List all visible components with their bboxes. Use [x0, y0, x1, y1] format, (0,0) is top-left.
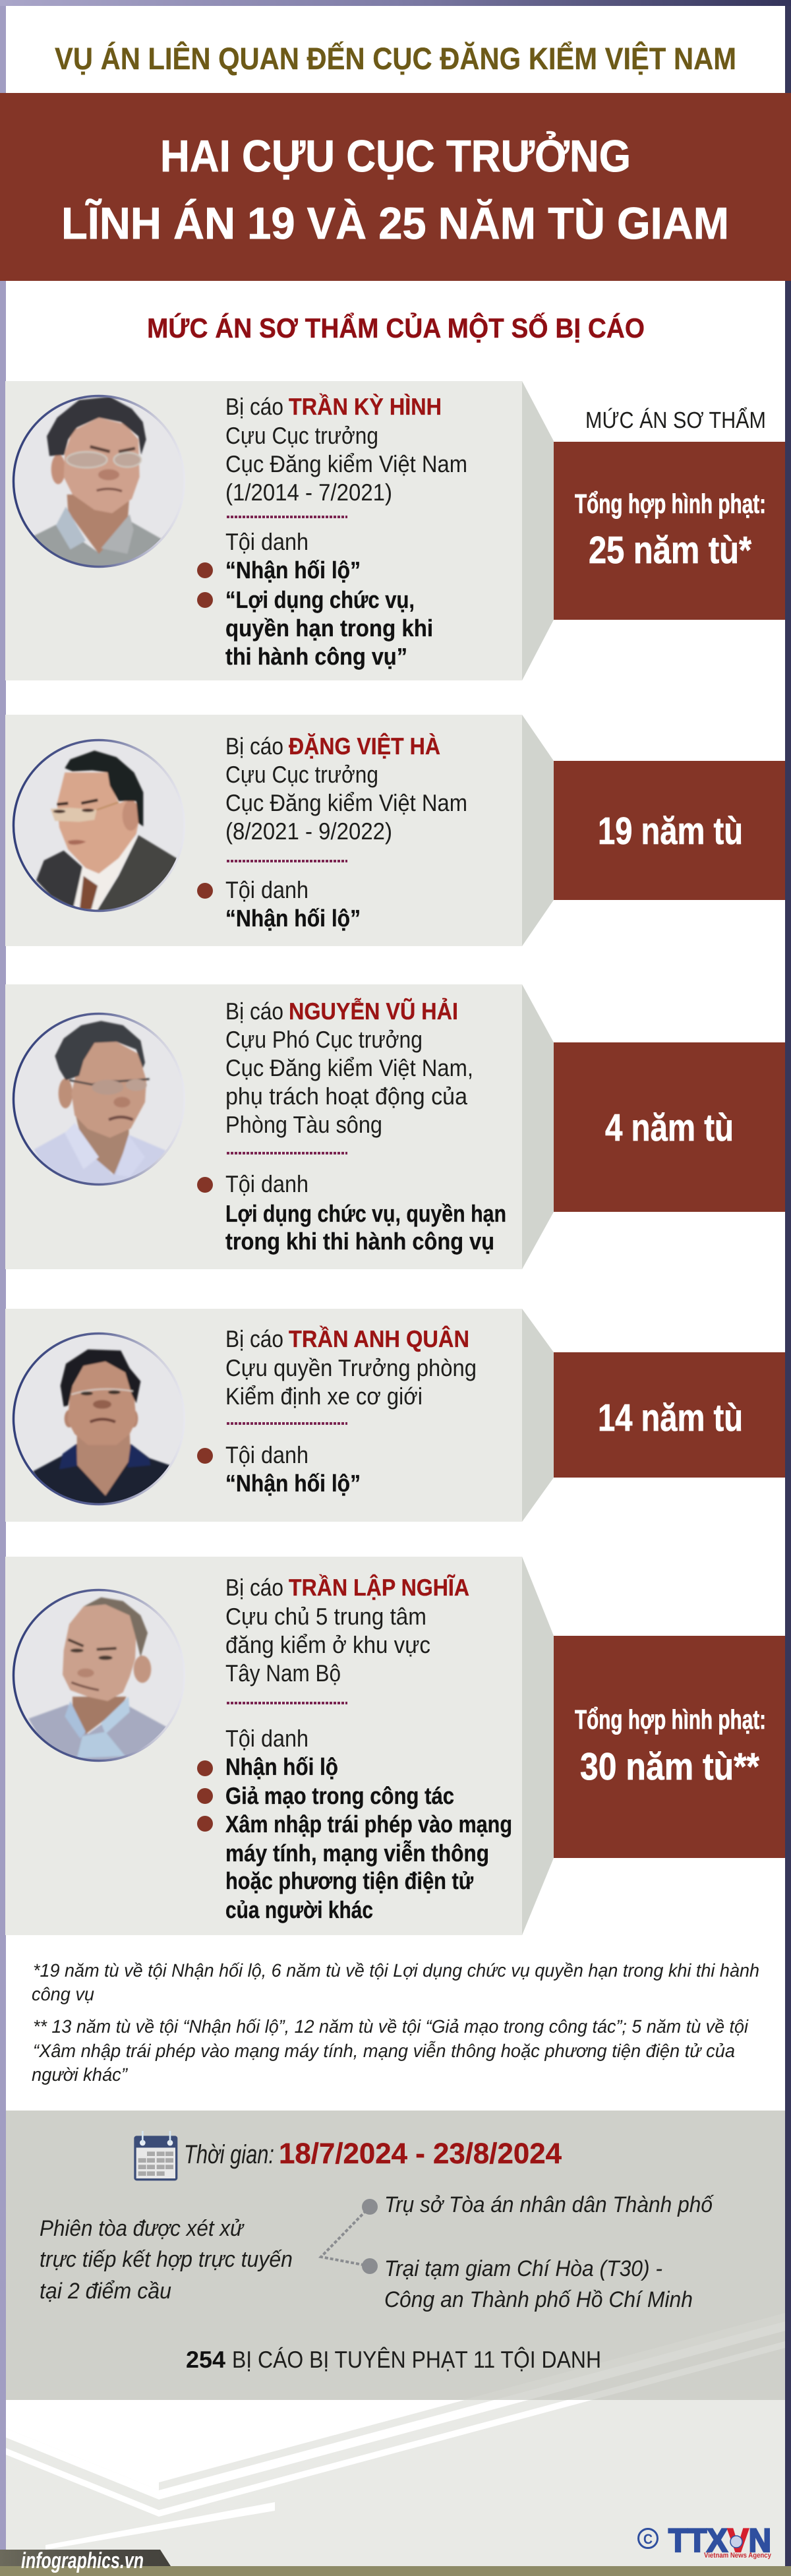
footnotes: ** 13 năm tù về tội “Nhận hối lộ”, 12 năm tù về tội “Giả mạo trong công tác”; 5 năm tù về tội	[33, 2016, 749, 2037]
footnotes	[32, 1960, 759, 2085]
text: trial format: Phiên tòa được xét xử	[40, 2216, 245, 2241]
text: charges: hoặc phương tiện điện tử	[225, 1867, 474, 1894]
text: defendant details: TRẦN ANH QUÂN	[289, 1325, 469, 1352]
subtitle: MỨC ÁN SƠ THẨM CỦA MỘT SỐ BỊ CÁO	[147, 313, 645, 344]
sentence box: 4 years: 4 năm tù	[605, 1106, 734, 1149]
text: charges: Xâm nhập trái phép vào mạng	[225, 1811, 512, 1838]
trial dates: Thời gian:	[184, 2140, 274, 2169]
text: trial format: trực tiếp kết hợp trực tuyến	[40, 2247, 293, 2272]
footnotes: *19 năm tù về tội Nhận hối lộ, 6 năm tù về tội Lợi dụng chức vụ quyền hạn trong khi thi hành	[33, 1960, 759, 1981]
summary: defendants and charges: BỊ CÁO BỊ TUYÊN PHẠT 11 TỘI DANH	[232, 2346, 601, 2373]
text: defendant details: Bị cáo	[225, 393, 283, 420]
logo: TTXVN: TTXVN	[668, 2522, 771, 2559]
text: defendant details	[225, 393, 467, 506]
text: defendant details: Cựu Phó Cục trưởng	[225, 1026, 423, 1053]
sentence box: 4 years	[554, 1042, 785, 1212]
text: defendant details: Cựu chủ 5 trung tâm	[225, 1603, 426, 1630]
text: charges: “Lợi dụng chức vụ,	[225, 586, 415, 613]
footnotes: “Xâm nhập trái phép vào mạng máy tính, mạng viễn thông hoặc phương tiện điện tử của	[33, 2041, 735, 2061]
panel: Nguyễn Vũ Hải	[5, 984, 554, 1269]
logo: TTXVN: C	[643, 2532, 653, 2547]
text: court locations: Trụ sở Tòa án nhân dân Thành phố	[384, 2192, 715, 2217]
column label: first-instance sentence: MỨC ÁN SƠ THẨM	[585, 407, 766, 433]
sentence box: 30 years: 30 năm tù**	[580, 1745, 759, 1788]
footer tab: site name: infographics.vn	[21, 2548, 144, 2573]
panel: Trần Anh Quân	[5, 1309, 554, 1522]
title text: LĨNH ÁN 19 VÀ 25 NĂM TÙ GIAM	[61, 198, 729, 249]
text: defendant details: Cục Đăng kiểm Việt Nam	[225, 450, 467, 477]
portrait ring	[13, 1590, 185, 1760]
sentence box: 30 years	[554, 1636, 785, 1858]
text: charges: “Nhận hối lộ”	[225, 905, 361, 932]
text: charges: Tội danh	[225, 528, 308, 555]
text: defendant details: (1/2014 - 7/2021)	[225, 479, 392, 506]
text: defendant details	[225, 998, 473, 1138]
text: charges: trong khi thi hành công vụ	[225, 1228, 494, 1255]
text: charges: Lợi dụng chức vụ, quyền hạn	[225, 1200, 506, 1227]
text: defendant details: Cựu Cục trưởng	[225, 422, 378, 449]
text: defendant details: Cục Đăng kiểm Việt Nam	[225, 789, 467, 816]
text: charges: Nhận hối lộ	[225, 1753, 338, 1780]
text: defendant details	[225, 1325, 477, 1410]
panel: Trần Kỳ Hình	[5, 381, 554, 680]
portrait ring	[13, 1333, 185, 1505]
title text	[61, 131, 729, 249]
portrait: Nguyễn Vũ Hải	[34, 1019, 166, 1183]
footer bar	[0, 2566, 791, 2576]
text: charges: máy tính, mạng viễn thông	[225, 1840, 489, 1867]
text: trial format: tại 2 điểm cầu	[40, 2279, 171, 2304]
text: charges: Tội danh	[225, 1170, 308, 1197]
text: defendant details: Kiểm định xe cơ giới	[225, 1383, 423, 1410]
text: defendant details: Tây Nam Bộ	[225, 1660, 341, 1687]
text: charges	[197, 528, 433, 670]
text: defendant details: TRẦN KỲ HÌNH	[289, 393, 442, 420]
text: charges: Tội danh	[225, 876, 308, 903]
connector: two court locations	[321, 2199, 378, 2274]
text: defendant details: Bị cáo	[225, 733, 283, 760]
text: defendant details	[225, 1574, 469, 1687]
text: charges	[197, 876, 361, 932]
text: charges: “Nhận hối lộ”	[225, 1470, 361, 1497]
text: defendant details: Bị cáo	[225, 1325, 283, 1352]
text: court locations: Trại tạm giam Chí Hòa (T30) -	[384, 2256, 662, 2281]
text: defendant details	[225, 733, 467, 845]
text: defendant details: NGUYỄN VŨ HẢI	[289, 998, 458, 1025]
footnotes: người khác”	[32, 2064, 129, 2085]
sentence box: 25 years	[554, 442, 785, 620]
text: charges	[197, 1170, 506, 1255]
sentence box: 19 years: 19 năm tù	[598, 810, 743, 853]
portrait: Trần Kỳ Hình	[34, 397, 161, 566]
trial dates: 18/7/2024 - 23/8/2024	[279, 2138, 562, 2170]
bottom decorative background	[6, 2321, 785, 2566]
text: defendant details: Phòng Tàu sông	[225, 1111, 382, 1138]
text: charges: “Nhận hối lộ”	[225, 556, 361, 584]
portrait ring	[13, 740, 185, 911]
text: defendant details: ĐẶNG VIỆT HÀ	[289, 733, 440, 760]
summary: defendants and charges: 254	[186, 2346, 225, 2373]
text: trial format	[40, 2216, 293, 2304]
portrait ring	[13, 1014, 185, 1184]
title text: HAI CỰU CỤC TRƯỞNG	[160, 131, 631, 181]
text: charges	[197, 1725, 512, 1923]
text: defendant details: TRẦN LẬP NGHĨA	[289, 1574, 469, 1601]
text: charges: của người khác	[225, 1896, 373, 1923]
portrait: Trần Anh Quân	[32, 1348, 170, 1503]
title band	[0, 93, 791, 281]
left edge bar	[0, 0, 6, 2576]
text: charges	[197, 1441, 361, 1497]
text: defendant details: (8/2021 - 9/2022)	[225, 818, 392, 845]
sentence box: 14 years	[554, 1352, 785, 1478]
text: court locations: Công an Thành phố Hồ Chí Minh	[384, 2287, 693, 2312]
text: charges: Giả mạo trong công tác	[225, 1782, 454, 1809]
top gradient bar	[0, 0, 791, 6]
sentence box: 14 years: 14 năm tù	[598, 1396, 743, 1439]
text: defendant details: đăng kiểm ở khu vực	[225, 1631, 430, 1658]
portrait: Đặng Việt Hà	[35, 749, 177, 910]
panel: Trần Lập Nghĩa	[5, 1557, 554, 1935]
text: defendant details: Bị cáo	[225, 998, 283, 1025]
portrait: Trần Lập Nghĩa	[28, 1596, 166, 1760]
footnotes: công vụ	[32, 1984, 94, 2004]
text: defendant details: Cục Đăng kiểm Việt Nam,	[225, 1054, 473, 1081]
sentence box: 19 years	[554, 761, 785, 900]
text: defendant details: Bị cáo	[225, 1574, 283, 1601]
text: defendant details: phụ trách hoạt động của	[225, 1083, 468, 1110]
logo: TTXVN: Vietnam News Agency	[704, 2552, 772, 2560]
text: charges: thi hành công vụ”	[225, 643, 407, 670]
right edge bar	[785, 0, 791, 2576]
text: charges: Tội danh	[225, 1725, 308, 1752]
portrait ring	[13, 396, 185, 567]
panel: Đặng Việt Hà	[5, 715, 554, 946]
text: defendant details: Cựu Cục trưởng	[225, 761, 378, 788]
icon: calendar	[134, 2131, 177, 2180]
text: charges: Tội danh	[225, 1441, 308, 1468]
text: defendant details: Cựu quyền Trưởng phòng	[225, 1354, 477, 1381]
info band: trial details	[6, 2111, 785, 2400]
text: court locations	[384, 2192, 715, 2312]
sentence box: 25 years: 25 năm tù*	[589, 529, 751, 572]
text: charges: quyền hạn trong khi	[225, 614, 433, 642]
